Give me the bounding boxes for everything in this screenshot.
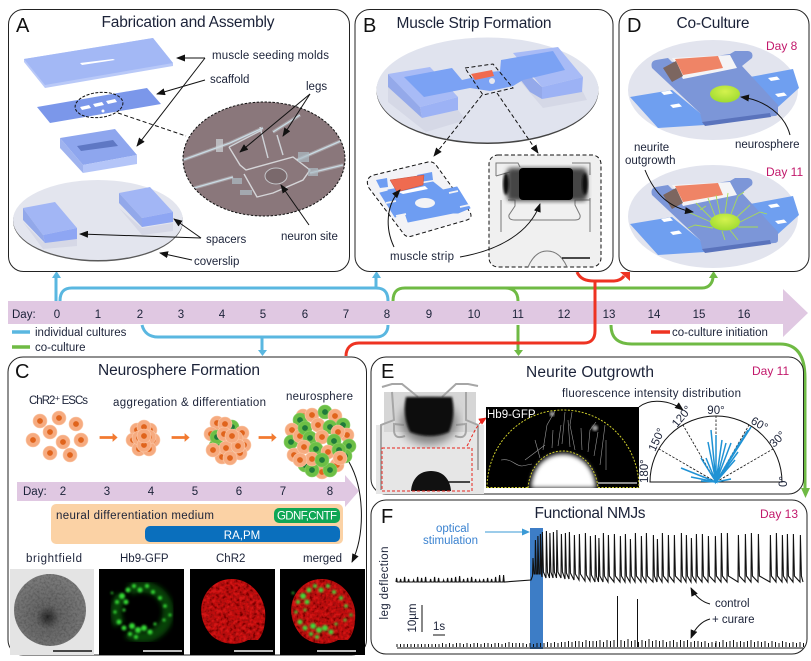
timeline day labels: 6	[302, 309, 308, 321]
trace labels: control	[715, 598, 750, 610]
muscle seeding mold plate	[24, 38, 173, 88]
label E: E	[381, 361, 394, 383]
day arrow C: 8	[327, 486, 333, 498]
mold block	[60, 129, 137, 173]
axis labels F: 1s	[433, 621, 445, 633]
brightfield image	[10, 569, 94, 655]
stage labels: ChR2⁺ ESCs	[29, 395, 88, 407]
labels and arrows D	[625, 97, 800, 212]
timeline day labels: Day:	[12, 309, 36, 321]
day arrow C	[17, 475, 359, 507]
timeline day labels: 12	[558, 309, 570, 321]
merged image	[280, 569, 365, 655]
timeline day labels: 9	[426, 309, 432, 321]
timeline day labels: 4	[219, 309, 226, 321]
day 11 device	[628, 165, 799, 268]
timeline day labels: 10	[468, 309, 480, 321]
labels and arrows D: neurite	[634, 142, 669, 154]
panel D: co-culture	[619, 10, 809, 272]
image labels: merged	[303, 553, 342, 565]
day arrow C: 5	[192, 486, 198, 498]
labels and arrows A: legs	[306, 81, 327, 93]
polar plot: 60°	[748, 415, 770, 434]
zoom arrow E	[467, 418, 486, 446]
legend: individual cultures	[35, 327, 127, 339]
panel B: muscle strip formation	[355, 10, 613, 272]
timeline day labels: 3	[178, 309, 184, 321]
image labels: brightfield	[26, 553, 82, 565]
title A: Fabrication and Assembly	[102, 14, 275, 31]
ChR2 image	[190, 569, 275, 655]
panel F: functional NMJs	[371, 500, 807, 654]
timeline day labels: 2	[137, 309, 143, 321]
stage labels: aggregation & differentiation	[113, 397, 266, 409]
label F: F	[381, 506, 393, 528]
polar plot: 30°	[768, 429, 788, 450]
labels and arrows A: spacers	[206, 234, 247, 246]
label A: A	[16, 15, 30, 37]
polar plot: 150°	[647, 427, 668, 453]
day arrow C: 4	[148, 486, 155, 498]
axis labels F: leg deflection	[379, 546, 391, 620]
labels and arrows A: scaffold	[210, 74, 249, 86]
day arrow C: 2	[60, 486, 66, 498]
labels and arrows A: coverslip	[194, 256, 239, 268]
photo inset	[180, 100, 350, 220]
timeline day labels: 15	[693, 309, 705, 321]
title B: Muscle Strip Formation	[396, 15, 552, 32]
coverslip with spacers	[13, 180, 183, 262]
labels and arrows D: outgrowth	[625, 155, 676, 167]
labels and arrows A	[80, 50, 338, 268]
arrows between stages	[100, 434, 276, 441]
legend: co-culture initiation	[672, 327, 768, 339]
image labels: ChR2	[216, 553, 245, 565]
intensity label: fluorescence intensity distribution	[562, 388, 741, 400]
day label E: Day 11	[752, 364, 789, 378]
optical stimulation label: stimulation	[423, 535, 478, 547]
trace labels	[691, 588, 755, 638]
RA PM box: RA,PM	[224, 530, 260, 542]
title D: Co-Culture	[676, 15, 750, 32]
day 8 device	[628, 40, 799, 140]
axis labels F: 10µm	[407, 604, 419, 632]
day arrow C: 7	[280, 486, 286, 498]
timeline day labels: 16	[738, 309, 750, 321]
polar plot: 0°	[778, 476, 790, 487]
label B: B	[363, 15, 376, 37]
optical stimulation label	[423, 523, 529, 547]
arrow to polar plot	[639, 401, 683, 410]
media schedule	[51, 504, 343, 544]
day labels D: Day 11	[766, 165, 803, 179]
labels and arrows A: muscle seeding molds	[212, 50, 329, 62]
timeline day labels: 14	[648, 309, 661, 321]
stage labels	[29, 391, 353, 409]
Hb9-GFP tag: Hb9-GFP	[487, 409, 536, 421]
title C: Neurosphere Formation	[98, 362, 260, 379]
fluorescence image	[486, 407, 639, 488]
coverslip assembly	[376, 38, 598, 144]
polar plot: 90°	[707, 405, 725, 417]
labels and arrows B: muscle strip	[390, 251, 454, 263]
inset: brightfield image	[489, 155, 601, 267]
stimulation bar	[530, 528, 543, 649]
day labels D: Day 8	[766, 39, 798, 53]
day label F: Day 13	[760, 507, 798, 521]
image labels: Hb9-GFP	[120, 553, 169, 565]
polar plot	[639, 404, 790, 487]
labels and arrows B	[388, 93, 540, 263]
timeline day labels: 5	[260, 309, 266, 321]
optical stimulation label: optical	[436, 523, 469, 535]
title F: Functional NMJs	[534, 505, 646, 522]
single cells	[26, 411, 88, 462]
stage labels: neurosphere	[286, 391, 353, 403]
curare trace	[397, 639, 804, 648]
timeline arrow	[8, 289, 808, 337]
GDNF CNTF box: GDNF,CNTF	[277, 510, 337, 522]
aggregate cluster	[126, 420, 160, 456]
timeline day labels: 13	[603, 309, 615, 321]
differentiating cluster	[204, 416, 251, 465]
timeline day labels: 1	[95, 309, 101, 321]
panel C: neurosphere formation	[8, 357, 366, 655]
RA PM box	[145, 526, 340, 542]
legend	[12, 327, 768, 354]
scaffold	[37, 88, 161, 123]
day arrow C: Day:	[23, 486, 47, 498]
timeline day labels: 0	[54, 309, 60, 321]
timeline day labels: 8	[384, 309, 390, 321]
timeline day labels	[12, 309, 750, 321]
timeline connectors: co-culture	[393, 271, 810, 498]
timeline day labels: 11	[512, 309, 524, 321]
label D: D	[627, 15, 641, 37]
Hb9-GFP image	[99, 569, 184, 655]
polar plot: 120°	[670, 404, 695, 430]
labels and arrows D: neurosphere	[735, 139, 800, 151]
arrow to merged	[349, 462, 361, 562]
day labels D	[766, 39, 803, 179]
label C: C	[15, 361, 29, 383]
timeline connectors: individual cultures	[52, 271, 388, 356]
legend: co-culture	[35, 342, 86, 354]
media schedule: neural differentiation medium	[56, 510, 214, 522]
timeline connectors: co-culture initiation	[346, 272, 630, 356]
timeline day labels: 7	[343, 309, 349, 321]
control trace	[396, 530, 803, 582]
inset: device close-up	[367, 162, 471, 237]
neurites	[688, 192, 767, 240]
day arrow C: 3	[104, 486, 110, 498]
brightfield photo E	[376, 384, 484, 494]
panel E: neurite outgrowth	[371, 357, 804, 494]
axis labels F	[379, 546, 445, 635]
panel A: fabrication and assembly	[8, 10, 350, 272]
title E: Neurite Outgrowth	[526, 364, 654, 381]
trace labels: + curare	[712, 614, 755, 626]
day arrow C: 6	[236, 486, 242, 498]
polar plot: 180°	[639, 459, 651, 483]
image labels	[26, 553, 342, 565]
labels and arrows A: neuron site	[281, 231, 338, 243]
neurosphere cluster	[284, 405, 356, 479]
